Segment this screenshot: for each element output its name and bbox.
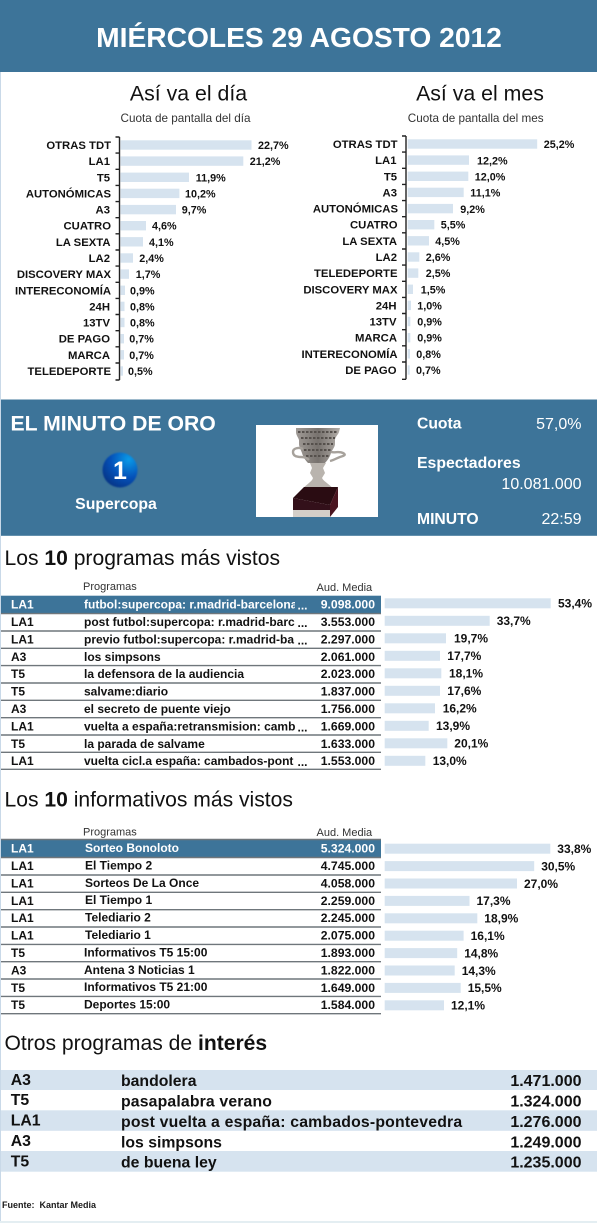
bar chart: cuota del día: OTRAS TDT [46,140,111,152]
table: los 10 informativos más vistos: El Tiempo 2 [85,858,152,872]
table: los 10 informativos más vistos: 1.584.000 [321,998,375,1012]
bar chart: cuota del mes: OTRAS TDT [333,139,398,151]
table: los 10 programas más vistos: 1.633.000 [321,737,375,751]
bar chart: cuota programas: 18,1% [449,667,483,681]
table: los 10 informativos más vistos: Sorteos De La Once [85,876,199,890]
bar chart: cuota del día: DE PAGO [59,334,110,346]
bar chart: cuota del mes: 2,5% [426,268,451,280]
table: otros programas: A3 [11,1133,31,1150]
table: los 10 informativos más vistos: LA1 [11,876,34,890]
photo: trophy [256,425,378,517]
stat: cuota: Cuota [417,416,462,432]
table: los 10 programas más vistos: A3 [11,650,27,664]
bar chart: cuota del día [15,137,289,380]
table: los 10 programas más vistos: previo futbol:supercopa: r.madrid-ba [84,632,294,646]
bar chart: cuota del día: 24H [89,301,110,313]
table: los 10 informativos más vistos: T5 [11,946,25,960]
stat: minuto [417,511,582,528]
table: los 10 informativos más vistos: LA1 [11,911,34,925]
table: los 10 informativos más vistos: Informativos T5 21:00 [84,980,208,994]
bar chart: cuota del mes: DE PAGO [345,365,397,377]
program name: Supercopa [75,496,157,513]
table: los 10 informativos más vistos: 1.649.000 [321,981,375,995]
table: los 10 programas más vistos: vuelta cicl.a españa: cambados-pont [84,754,293,768]
bar chart: cuota del mes: A3 [383,187,397,199]
bar chart: cuota del mes: 5,5% [441,220,466,232]
bar chart: cuota del mes: TELEDEPORTE [314,268,398,280]
table: los 10 informativos más vistos: 5.324.000 [321,842,375,856]
bar chart: cuota del mes: LA SEXTA [342,236,397,248]
panel: así va el día [15,82,289,380]
bar chart: cuota programas: 13,0% [433,754,467,768]
bar chart: cuota del día: 0,9% [130,285,155,297]
bar chart: cuota del mes: T5 [384,171,397,183]
bar chart: cuota programas: 20,1% [454,737,489,751]
bar chart: cuota informativos: 12,1% [451,999,485,1013]
table: los 10 informativos más vistos: LA1 [11,859,34,873]
stat: cuota [417,416,582,433]
table: otros programas: 1.324.000 [510,1094,582,1110]
bar chart: cuota del mes: 9,2% [460,204,485,216]
table: los 10 programas más vistos: los simpsons [84,650,161,664]
bar chart: cuota del día: TELEDEPORTE [28,366,111,378]
bar chart: cuota programas: 19,7% [454,632,488,646]
table: los 10 informativos más vistos: Antena 3 Noticias 1 [84,963,195,977]
bar chart: cuota del día: 21,2% [250,156,281,168]
bar chart: cuota programas: 16,2% [443,702,477,716]
bar chart: cuota del mes: 0,9% [417,333,442,345]
table: otros programas: bandolera [121,1073,197,1090]
bar chart: cuota del día: 2,4% [139,253,164,265]
table: los 10 programas más vistos: LA1 [11,598,34,612]
heading: los 10 informativos: Los 10 informativos más vistos [4,788,293,812]
heading: los 10 programas: Los 10 programas más vistos [4,547,280,570]
table: los 10 informativos más vistos: 2.259.000 [321,894,375,908]
table: otros programas: post vuelta a españa: cambados-pontevedra [121,1114,462,1131]
title banner: MIÉRCOLES 29 AGOSTO 2012 [96,21,502,53]
bar chart: cuota del día: LA1 [89,156,110,168]
table: los 10 programas más vistos: LA1 [11,615,34,629]
bar chart: cuota del mes: 24H [376,300,396,312]
bar chart: cuota del día: 13TV [83,318,110,330]
bar chart: cuota del día: A3 [96,205,110,217]
bar chart: cuota informativos: 17,3% [476,894,511,908]
table: los 10 programas más vistos: la parada de salvame [84,737,205,751]
bar chart: cuota del día: 9,7% [182,205,207,217]
table: los 10 informativos más vistos: 4.058.000 [321,876,375,890]
table: los 10 programas más vistos: 1.553.000 [321,754,375,768]
bar chart: cuota del día: T5 [97,172,110,184]
table: otros programas: pasapalabra verano [121,1094,272,1110]
table: los 10 informativos más vistos: El Tiempo 1 [85,893,152,907]
table: los 10 programas más vistos: la defensora de la audiencia [84,667,244,681]
icon: La 1 logo [102,452,138,488]
panel: así va el mes [301,82,575,379]
table: los 10 programas más vistos: T5 [11,667,25,681]
bar chart: cuota del mes: 0,7% [416,365,441,377]
table: los 10 programas más vistos: 2.061.000 [321,650,375,664]
bar chart: cuota del mes: 12,0% [475,171,506,183]
table: los 10 informativos más vistos: 1.822.000 [321,963,375,977]
table: los 10 programas más vistos: LA1 [11,719,34,733]
bar chart: cuota del día: CUATRO [64,221,111,233]
table: otros programas: T5 [11,1154,29,1170]
table: los 10 programas más vistos: ... [298,720,308,734]
table: los 10 programas más vistos: 1.669.000 [321,719,375,733]
bar chart: cuota del mes: 25,2% [544,139,575,151]
bar chart: cuota programas: 17,7% [447,649,482,663]
table: los 10 informativos más vistos: Programas [83,826,137,838]
heading: así va el día: Así va el día [130,82,247,106]
bar chart: cuota del día: INTERECONOMÍA [15,284,111,297]
heading: el minuto de oro: EL MINUTO DE ORO [10,412,216,436]
table: los 10 informativos más vistos: Sorteo Bonoloto [85,841,179,855]
heading: otros programas de interés: Otros programas de interés [4,1032,267,1055]
bar chart: cuota informativos: 27,0% [524,877,558,891]
table: los 10 programas más vistos: 1.756.000 [321,702,375,716]
table: los 10 programas más vistos: ... [298,755,308,769]
bar chart: cuota del mes [301,136,575,379]
table: otros programas: 1.249.000 [510,1134,582,1151]
table: otros programas: T5 [11,1092,29,1109]
table: los 10 programas más vistos: post futbol:supercopa: r.madrid-barc [84,615,295,629]
table: los 10 informativos más vistos [1,826,381,1014]
table: los 10 informativos más vistos: T5 [11,998,25,1012]
bar chart: cuota del mes: 1,0% [417,300,442,312]
bar chart: cuota del mes: AUTONÓMICAS [313,203,398,216]
table: los 10 programas más vistos: ... [298,598,308,612]
bar chart: cuota del día: 0,7% [129,334,154,346]
panel: el minuto de oro [1,400,597,536]
bar chart: cuota del mes: DISCOVERY MAX [303,284,398,296]
bar chart: cuota informativos [385,842,592,1013]
bar chart: cuota del día: 0,8% [130,301,155,313]
table: los 10 informativos más vistos: Telediario 1 [85,928,151,942]
table: los 10 informativos más vistos: LA1 [11,842,34,856]
bar chart: cuota del mes: 0,8% [416,349,441,361]
table: los 10 programas más vistos: Aud. Media [316,582,373,594]
bar chart: cuota del día: 22,7% [258,140,289,152]
table: los 10 informativos más vistos: A3 [11,963,27,977]
table: los 10 programas más vistos: futbol:supercopa: r.madrid-barcelona [84,598,298,612]
table: los 10 programas más vistos: T5 [11,685,25,699]
table: los 10 programas más vistos: vuelta a españa:retransmision: camb [84,719,295,733]
stat: minuto: MINUTO [417,511,479,528]
bar chart: cuota del día: LA2 [89,253,110,265]
bar chart: cuota del día: MARCA [68,350,110,362]
bar chart: cuota del mes: 11,1% [470,187,501,199]
table: los 10 programas más vistos: A3 [11,702,27,716]
stat: cuota: 57,0% [536,416,582,433]
bar chart: cuota del mes: 1,5% [421,284,446,296]
table: los 10 informativos más vistos: T5 [11,981,25,995]
table: los 10 programas más vistos: ... [298,616,308,630]
bar chart: cuota informativos: 14,3% [462,964,496,978]
table: otros programas: LA1 [11,1112,41,1130]
subheading: cuota del mes: Cuota de pantalla del mes [408,112,544,125]
table: otros programas [1,1070,597,1172]
table: los 10 programas más vistos: LA1 [11,632,34,646]
table: los 10 programas más vistos: el secreto de puente viejo [84,702,231,716]
table: los 10 programas más vistos: ... [298,633,308,647]
bar chart: cuota informativos: 16,1% [471,929,505,943]
table: los 10 informativos más vistos: LA1 [11,929,34,943]
bar chart: cuota programas: 53,4% [558,597,592,611]
table: los 10 programas más vistos: salvame:diario [84,685,168,699]
bar chart: cuota del día: 4,1% [149,237,174,249]
table: los 10 programas más vistos [1,581,381,769]
stat: espectadores: Espectadores [417,455,521,472]
stat: minuto: 22:59 [541,511,582,528]
table: otros programas: 1.235.000 [510,1155,582,1172]
bar chart: cuota informativos: 18,9% [484,912,519,926]
bar chart: cuota del día: 0,8% [130,318,155,330]
bar chart: cuota del mes: 4,5% [435,236,460,248]
table: otros programas: de buena ley [121,1155,217,1172]
source note: Fuente: Kantar Media [2,1200,97,1210]
bar chart: cuota del día: DISCOVERY MAX [17,269,111,281]
table: los 10 informativos más vistos: Deportes 15:00 [84,998,170,1012]
bar chart: cuota programas: 17,6% [447,684,482,698]
stat: espectadores: 10.081.000 [501,476,582,493]
bar chart: cuota programas: 13,9% [436,719,470,733]
bar chart: cuota del día: 0,7% [129,350,154,362]
bar chart: cuota informativos: 14,8% [464,946,499,960]
bar chart: cuota del mes: 13TV [369,316,397,328]
bar chart: cuota del día: 10,2% [185,188,216,200]
table: otros programas: A3 [11,1072,31,1089]
bar chart: cuota del mes: MARCA [355,333,397,345]
bar chart: cuota informativos: 15,5% [468,981,502,995]
table: los 10 informativos más vistos: LA1 [11,894,34,908]
table: los 10 programas más vistos: 1.837.000 [321,685,375,699]
bar chart: cuota del día: 11,9% [196,172,226,184]
bar chart: cuota del mes: LA1 [375,155,396,167]
title banner [0,0,597,72]
table: otros programas: 1.471.000 [510,1073,582,1090]
table: los 10 informativos más vistos: Informativos T5 15:00 [84,945,208,959]
table: los 10 programas más vistos: 9.098.000 [321,598,375,612]
table: los 10 informativos más vistos: 2.245.000 [321,911,375,925]
bar chart: cuota programas: 33,7% [497,614,531,628]
bar chart: cuota del día: AUTONÓMICAS [26,187,111,200]
bar chart: cuota del día: 4,6% [152,221,177,233]
table: los 10 programas más vistos: 2.297.000 [321,632,375,646]
bar chart: cuota del día: 0,5% [128,366,153,378]
table: los 10 informativos más vistos: 2.075.000 [321,929,375,943]
bar chart: cuota del día: LA SEXTA [56,237,110,249]
subheading: cuota del día: Cuota de pantalla del día [121,112,251,125]
table: los 10 informativos más vistos: 1.893.000 [321,946,375,960]
stat: espectadores [417,455,582,493]
bar chart: cuota del mes: INTERECONOMÍA [301,348,398,361]
bar chart: cuota programas [385,597,592,768]
table: los 10 informativos más vistos: Telediario 2 [85,911,151,925]
table: otros programas: los simpsons [121,1134,222,1151]
table: otros programas: 1.276.000 [510,1114,582,1131]
icon: La 1 logo: 1 [113,457,127,485]
bar chart: cuota informativos: 30,5% [541,859,576,873]
table: los 10 informativos más vistos: Aud. Media [316,827,373,839]
table: los 10 programas más vistos: 3.553.000 [321,615,375,629]
bar chart: cuota del mes: 12,2% [477,156,508,168]
bar chart: cuota del día: 1,7% [136,269,161,281]
table: los 10 programas más vistos: Programas [83,581,137,593]
bar chart: cuota del mes: CUATRO [350,220,398,232]
heading: así va el mes: Así va el mes [416,82,544,106]
table: los 10 programas más vistos: LA1 [11,754,34,768]
bar chart: cuota informativos: 33,8% [557,842,592,856]
table: los 10 programas más vistos: T5 [11,737,25,751]
table: los 10 informativos más vistos: 4.745.000 [321,859,375,873]
table: los 10 programas más vistos: 2.023.000 [321,667,375,681]
bar chart: cuota del mes: 2,6% [426,252,451,264]
bar chart: cuota del mes: 0,9% [417,316,442,328]
bar chart: cuota del mes: LA2 [376,252,397,264]
